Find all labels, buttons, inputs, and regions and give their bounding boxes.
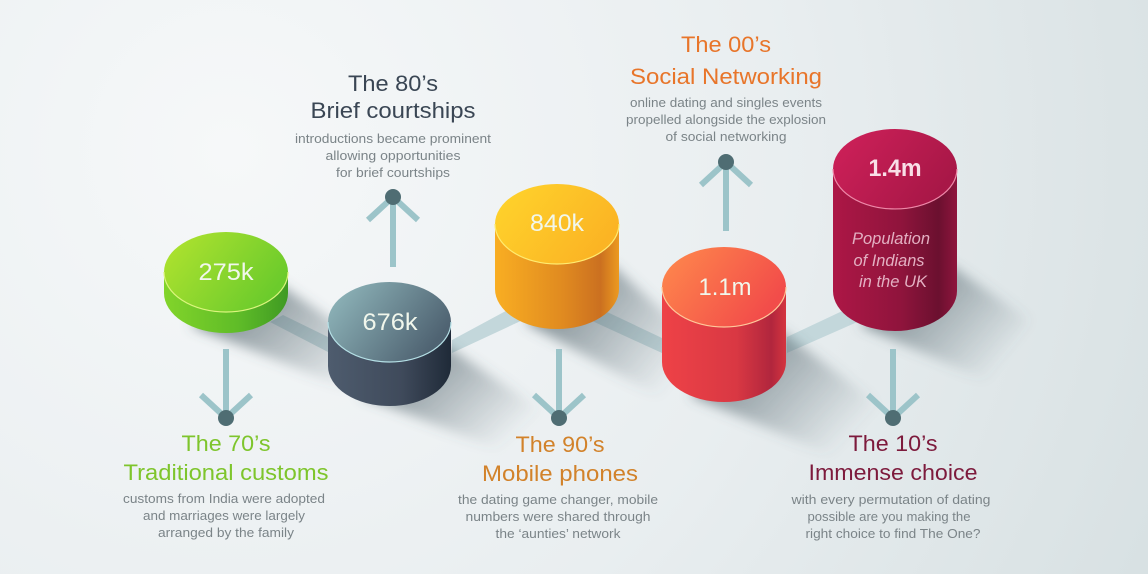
cylinder: 1.4m <box>833 129 957 331</box>
heading: The 90's: Mobile phones <box>482 461 638 486</box>
text: 00's <box>626 96 826 144</box>
cylinder: 1.4m: 1.4m <box>868 155 922 182</box>
text: 80's: allowing opportunities <box>326 149 460 163</box>
connector lines <box>270 298 880 353</box>
cylinder: 676k <box>328 282 451 406</box>
heading: The 10's <box>808 431 978 485</box>
arrow: 00's <box>701 154 751 231</box>
text: 80's <box>295 132 492 180</box>
heading: The 70's: The 70’s <box>182 431 270 456</box>
cylinder: 275k <box>164 232 288 333</box>
cylinder: 676k: 676k <box>362 309 419 336</box>
text: 10's: with every permutation of dating <box>790 493 991 507</box>
heading: The 90's <box>482 432 638 486</box>
text: 00's: of social networking <box>666 130 787 144</box>
cylinder: 1.1m <box>662 247 786 402</box>
text: 10's: right choice to find The One? <box>806 527 981 541</box>
heading: The 90's: The 90’s <box>516 432 604 457</box>
text: 90's: numbers were shared through <box>466 510 651 524</box>
cylinder: 1.1m: 1.1m <box>698 274 752 301</box>
heading: The 00's <box>630 32 822 89</box>
cylinder: 840k: 840k <box>530 210 585 237</box>
text: 70's: customs from India were adopted <box>123 492 325 506</box>
heading: The 00's: Social Networking <box>630 64 822 89</box>
heading: The 80's <box>310 71 476 123</box>
cylinder: 275k: 275k <box>198 259 255 286</box>
heading: The 10's: The 10’s <box>848 431 938 456</box>
heading: The 10's: Immense choice <box>808 460 978 485</box>
heading: The 80's: Brief courtships <box>310 98 476 123</box>
cylinder label: Population <box>852 229 930 248</box>
text: 70's: and marriages were largely <box>143 509 306 523</box>
arrow: 90's <box>534 349 584 426</box>
heading: The 70's: Traditional customs <box>124 460 328 485</box>
heading: The 00's: The 00’s <box>681 32 771 57</box>
text: 70's: arranged by the family <box>158 526 295 540</box>
text: 00's: online dating and singles events <box>630 96 822 110</box>
cylinder label <box>852 229 930 291</box>
text: 90's <box>458 493 658 541</box>
heading: The 70's <box>124 431 328 485</box>
text: 10's: possible are you making the <box>808 510 971 524</box>
text: 90's: the ‘aunties’ network <box>496 527 621 541</box>
text: 80's: for brief courtships <box>336 166 450 180</box>
text: 00's: propelled alongside the explosion <box>626 113 826 127</box>
heading: The 80's: The 80’s <box>348 71 438 96</box>
arrow: 10's <box>868 349 918 426</box>
cylinder: 840k <box>495 184 619 329</box>
text: 70's <box>123 492 325 540</box>
text: 90's: the dating game changer, mobile <box>458 493 658 507</box>
cylinder shadows <box>190 265 1030 455</box>
cylinder label: in the UK <box>859 272 928 291</box>
cylinder label: of Indians <box>854 251 925 270</box>
arrow: 70's <box>201 349 251 426</box>
arrow: 80's <box>368 189 418 267</box>
text: 80's: introductions became prominent <box>295 132 492 146</box>
text: 10's <box>790 493 991 541</box>
